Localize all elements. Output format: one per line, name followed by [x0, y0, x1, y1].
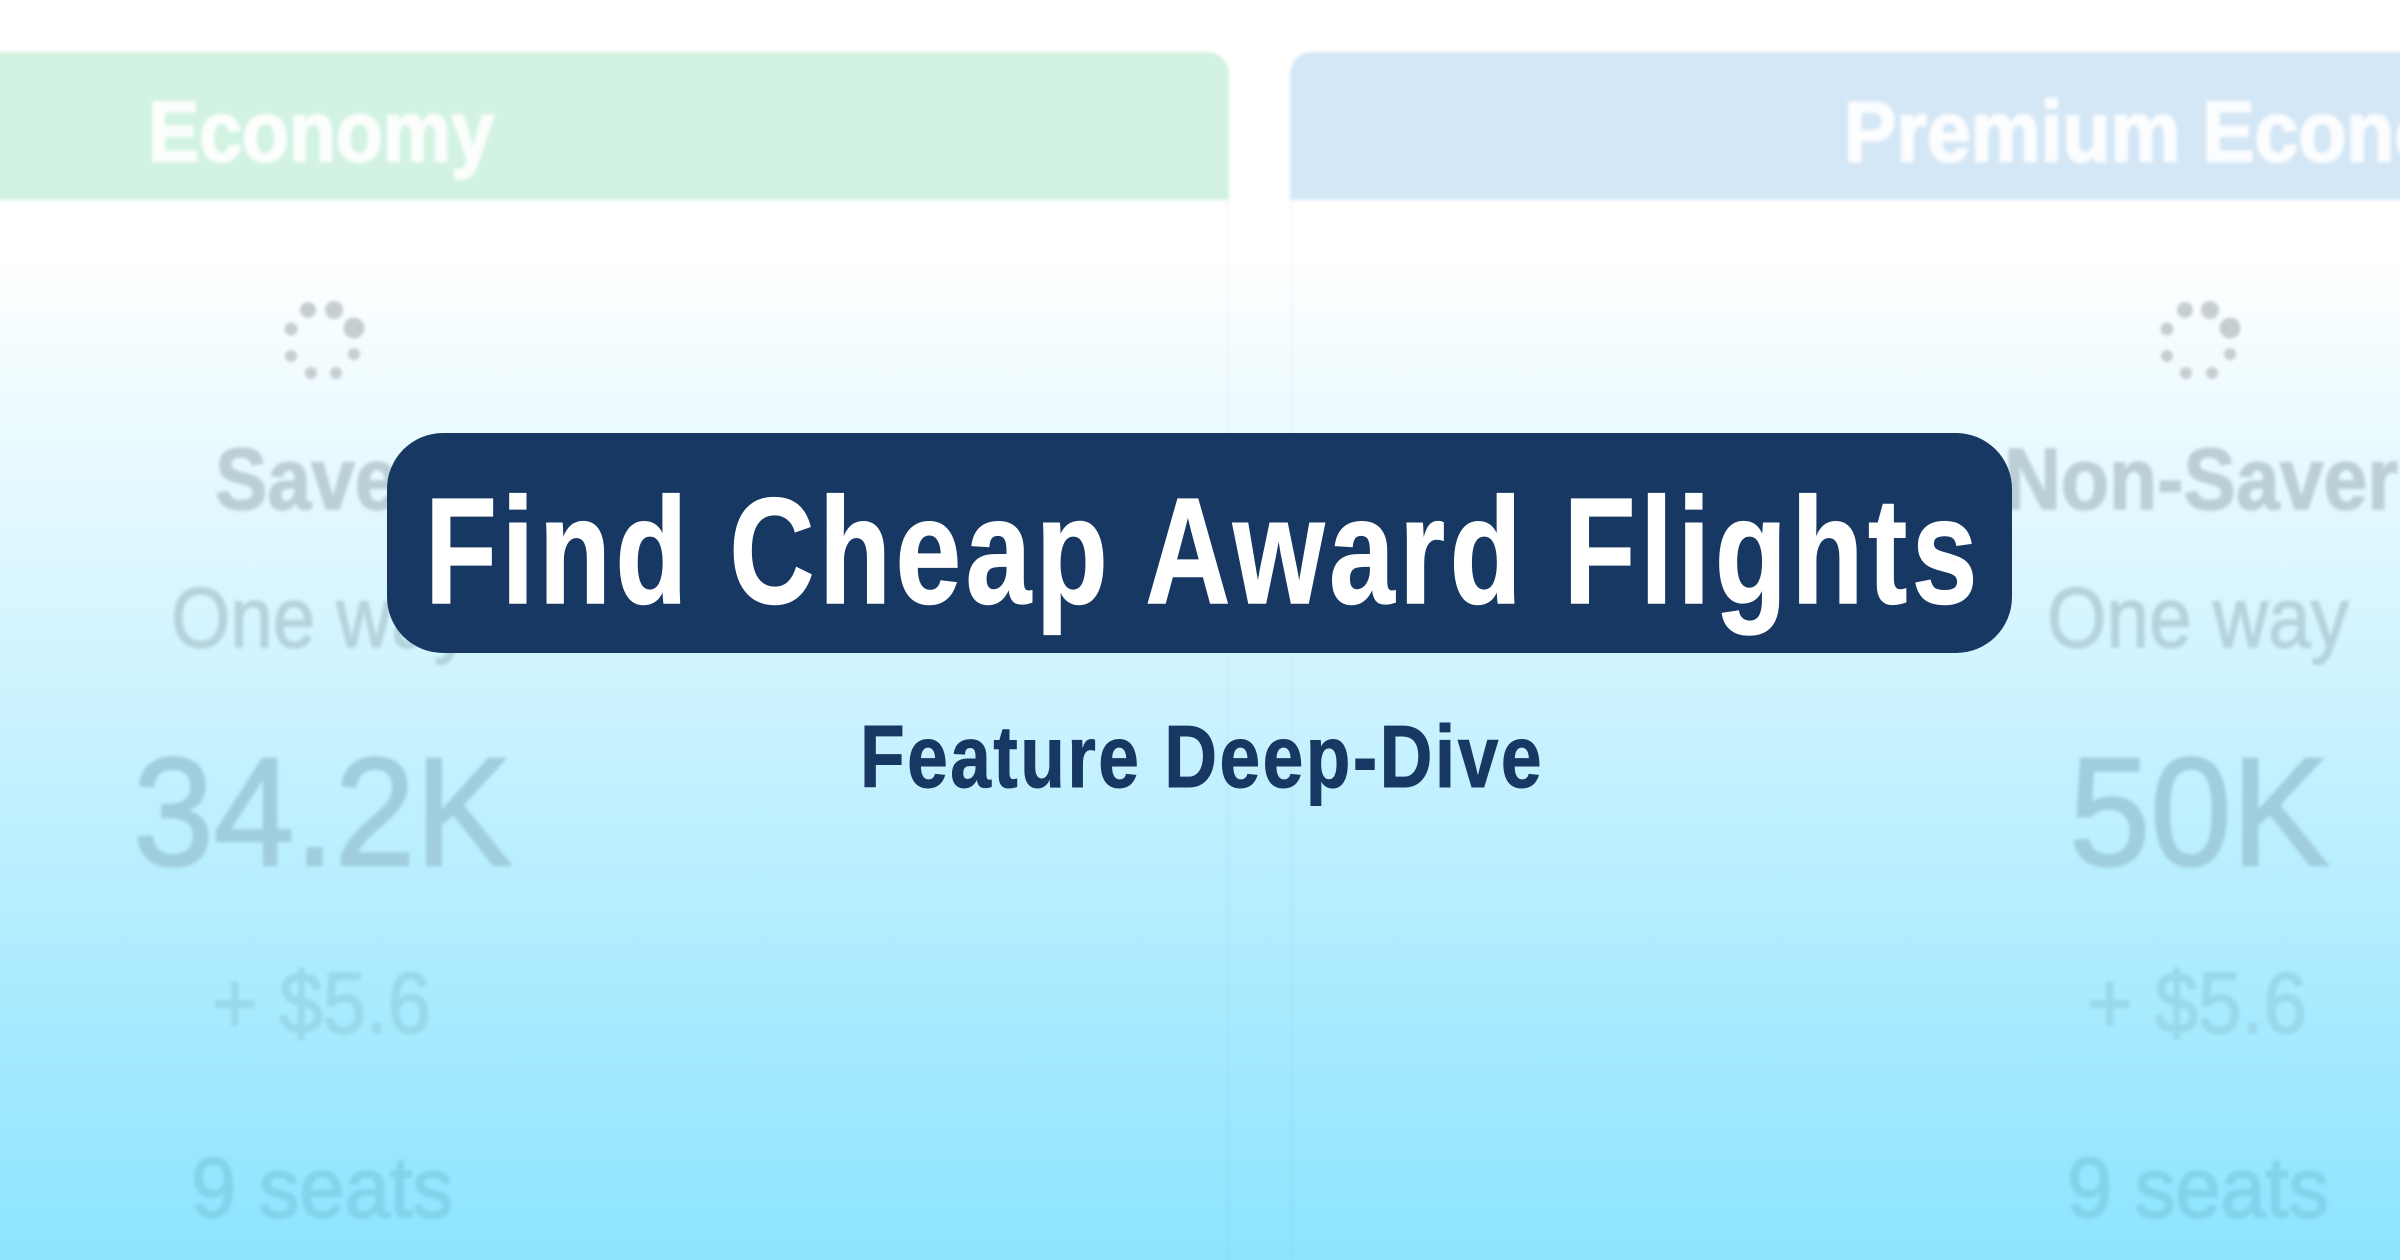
- points price: 34.2K: [133, 726, 512, 898]
- icon: loading spinner: [284, 301, 364, 379]
- seats available: 9 seats: [191, 1141, 453, 1236]
- seats available: 9 seats: [2067, 1141, 2329, 1236]
- one way label: One way: [2047, 571, 2349, 666]
- premium economy header bar: [1290, 52, 2400, 200]
- one way label: One way: [171, 571, 472, 666]
- points price: 50K: [2069, 726, 2329, 898]
- economy header bar: [0, 52, 1229, 200]
- economy heading: Economy: [148, 85, 494, 180]
- title banner: [387, 433, 2012, 653]
- cash fee: + $5.6: [2087, 955, 2307, 1052]
- subtitle: Feature Deep-Dive: [860, 707, 1544, 806]
- column border: [1290, 199, 1293, 1260]
- icon: loading spinner: [2160, 301, 2240, 379]
- panel: premium economy column (blurred): [1290, 52, 2400, 1260]
- cash fee: + $5.6: [212, 955, 431, 1052]
- title: Find Cheap Award Flights: [425, 466, 1982, 635]
- panel: economy column (blurred): [0, 52, 1229, 1260]
- column border: [1226, 199, 1229, 1260]
- saver label: Saver: [215, 431, 429, 528]
- banner background: [387, 433, 2012, 653]
